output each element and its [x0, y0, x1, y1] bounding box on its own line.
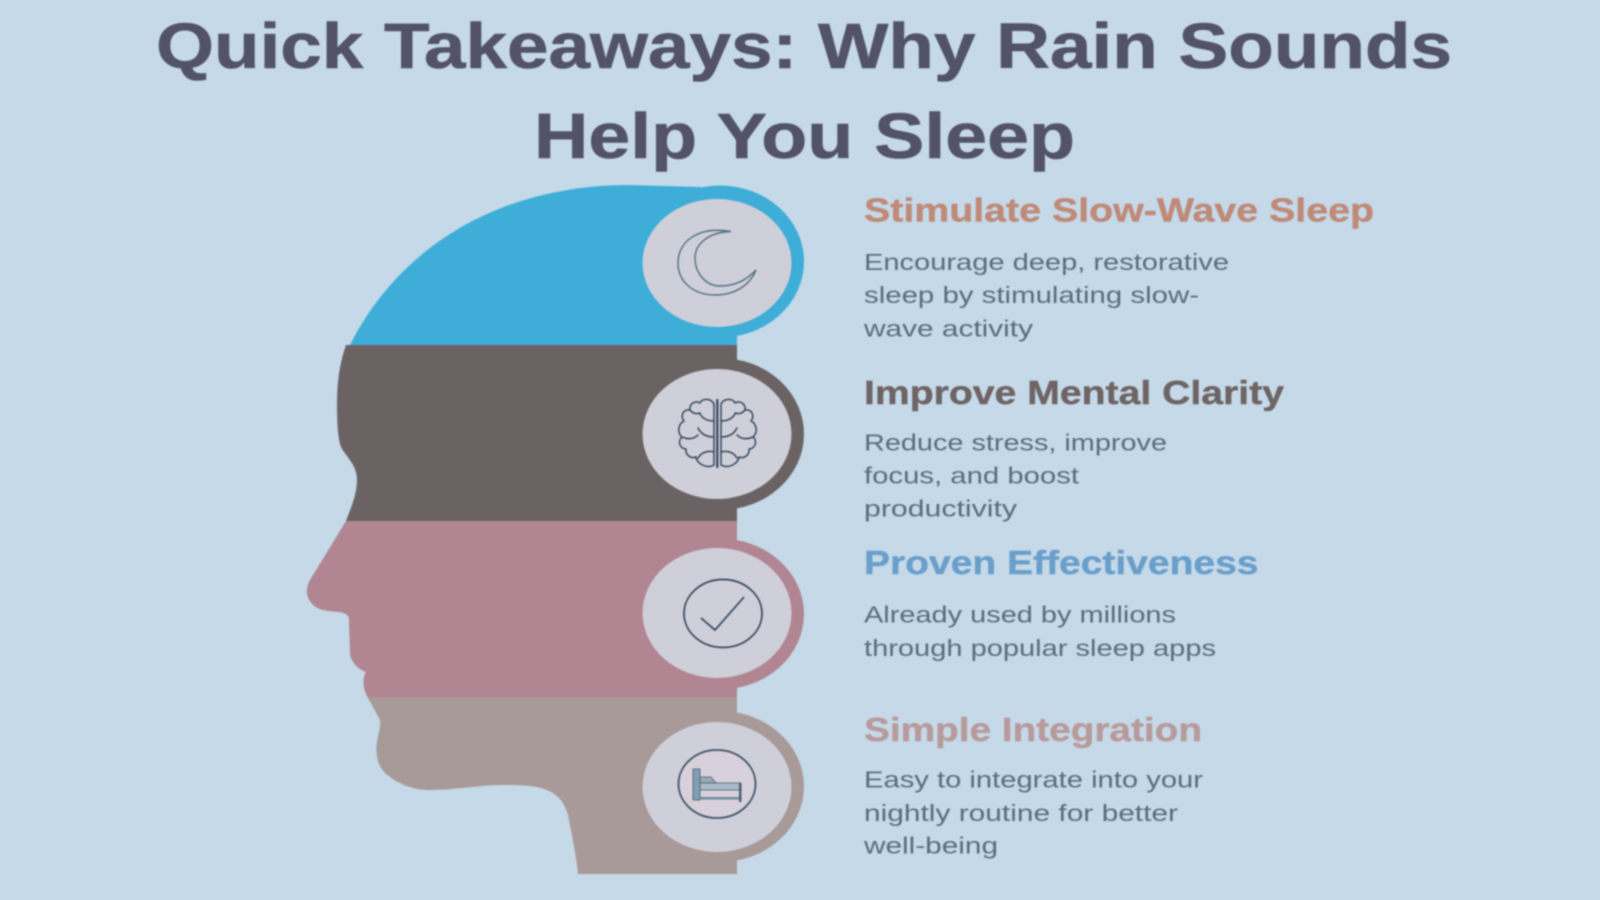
- section: improve mental clarity: Improve Mental Clarity: [864, 374, 1285, 411]
- section: improve mental clarity: productivity: [864, 496, 1018, 522]
- section: stimulate slow-wave sleep: [863, 192, 1374, 342]
- head band: crown with sleep icon: [350, 185, 804, 345]
- section: proven effectiveness: [864, 544, 1258, 661]
- head band: forehead with brain icon: [337, 345, 804, 521]
- section: proven effectiveness: Already used by millions: [864, 602, 1176, 628]
- section: simple integration: well-being: [863, 832, 998, 858]
- section: proven effectiveness: Proven Effectiveness: [864, 544, 1258, 581]
- section: stimulate slow-wave sleep: Encourage deep, restorative: [864, 249, 1229, 275]
- section: improve mental clarity: [864, 374, 1285, 522]
- section: stimulate slow-wave sleep: Stimulate Slow-Wave Sleep: [864, 192, 1374, 228]
- title: Quick Takeaways: Why Rain Sounds: [156, 10, 1452, 82]
- head band: chin and neck with bed icon: [368, 697, 804, 874]
- title: [156, 10, 1452, 172]
- head band: nose with check icon: [307, 521, 804, 697]
- section: improve mental clarity: focus, and boost: [864, 462, 1080, 488]
- section: simple integration: Easy to integrate into your: [864, 766, 1203, 792]
- section: proven effectiveness: through popular sleep apps: [864, 635, 1216, 661]
- section: simple integration: [863, 711, 1203, 858]
- section: stimulate slow-wave sleep: wave activity: [863, 316, 1034, 342]
- section: simple integration: nightly routine for better: [864, 800, 1178, 826]
- section: simple integration: Simple Integration: [864, 711, 1202, 748]
- section: improve mental clarity: Reduce stress, improve: [864, 430, 1167, 456]
- section: stimulate slow-wave sleep: sleep by stimulating slow-: [864, 282, 1199, 308]
- head profile infographic: [307, 185, 804, 874]
- title: Help You Sleep: [534, 100, 1075, 172]
